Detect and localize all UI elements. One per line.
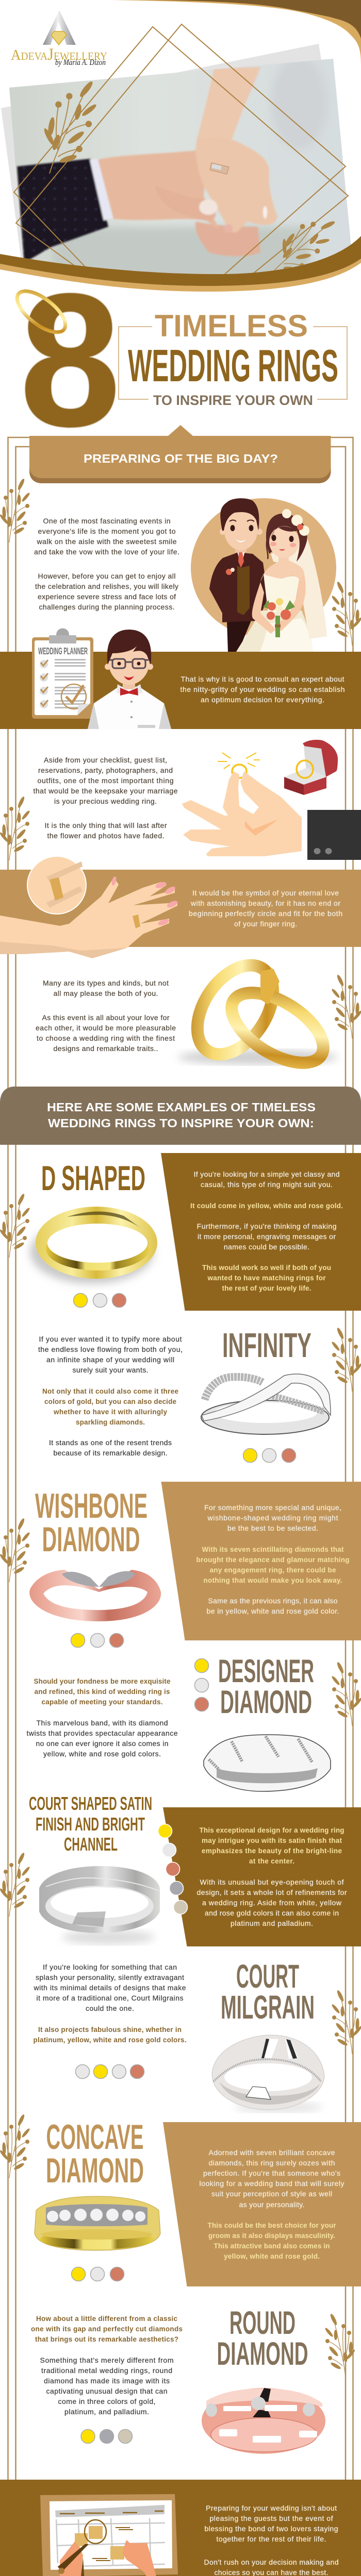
text: court shaped [197,1826,347,1927]
icon: gold ring on the 8 [10,284,72,340]
sprig: hero right [273,222,335,270]
logo: Adeva Jewellery: by Maria A. Dizon [55,58,106,67]
text: preparing: blessing the bond of two lovers staying [204,2524,338,2533]
hero photo: holding hands with ring [1,24,351,274]
magnified ring circle [27,856,86,914]
text: consult an expert: the nitty-gritty of your wedding so can establish [180,685,344,693]
image: D shaped gold ring [30,1207,157,1284]
sprig: left [0,796,30,860]
text: preparing: Preparing for your wedding isn't about [206,2504,337,2512]
text: types and kinds: to choose a wedding ring with the finest [37,1034,175,1042]
text: wishbone: nothing that would make you look away. [203,1577,342,1584]
geometric diamond frame [13,24,349,274]
text: D shaped: This would work so well if both of you [202,1264,331,1272]
text: designer diamond: twists that provides spectacular appearance [27,1729,178,1737]
sprig: right [331,1990,361,2054]
text: D shaped: If you're looking for a simple yet classy and [194,1170,339,1178]
banner: examples [0,1087,361,1145]
sprig: left [0,478,30,543]
image: designer silver ring [204,1735,331,1791]
text: court milgrain: It also projects fabulous shine, whether in [38,2026,182,2033]
image: two gold wedding rings [178,952,338,1077]
sprig: hero left [44,81,96,174]
text: court milgrain: with its minimal details of designs that make [33,1984,186,1992]
text: wishbone: any engagement ring, there could be [209,1566,336,1574]
band: symbol of eternal love [0,870,361,947]
text: types and kinds [36,979,176,1053]
heading: Concave Diamond: CONCAVE [46,2117,143,2157]
panel: wishbone [161,1482,361,1640]
image: wishbone rose ring [29,1570,161,1621]
text: court shaped: With its unusual but eye-opening touch of [200,1878,344,1886]
double frame rails [8,437,353,2576]
heading: Round Diamond [217,2305,308,2372]
text: D shaped: Furthermore, if you're thinking of making [197,1222,336,1230]
text: infinity: because of its remarkable design. [54,1449,167,1457]
text: concave: as your personality. [239,2200,304,2209]
text: court shaped: platinum and palladium. [231,1919,313,1927]
text: D shaped: the rest of your lovely life. [222,1284,311,1292]
intro text: the celebration and relishes, you will likely [35,582,178,590]
text: round diamond: How about a little different from a classic [36,2315,177,2323]
intro text: challenges during the planning process. [39,603,174,611]
text: D shaped: casual, this type of ring might suit you. [201,1180,333,1189]
text: checklist: It is the only thing that will last after [44,821,167,829]
text: concave: perfection. If you're that someone who's [203,2169,340,2177]
panel: concave [163,2122,361,2286]
heading: Court Shaped Satin: FINISH AND BRIGHT [36,1814,145,1835]
text: types and kinds: As this event is all about your love for [42,1013,170,1022]
swatches: infinity [243,1449,296,1462]
text: concave: looking for a wedding band that will surely [199,2179,344,2188]
text: concave: diamonds, this ring surely oozes with [208,2159,335,2167]
intro text [34,517,179,611]
text: designer diamond [27,1677,178,1758]
heading: Wishbone Diamond [35,1486,147,1559]
image: court milgrain ring [212,2035,324,2112]
sprig: left [0,1518,30,1582]
text: round diamond: traditional metal wedding rings, round [41,2366,172,2375]
sprig: right [331,1327,361,1392]
text: infinity [38,1335,183,1457]
heading: Round Diamond: ROUND [229,2305,296,2341]
text: court shaped: a wedding ring. Aside from white, yellow [202,1899,342,1907]
text: D shaped [190,1170,343,1292]
intro text: everyone's life is the moment you got to [38,527,176,535]
logo: Adeva Jewellery: ADEVAJEWELLERY [11,45,107,64]
heading: Wishbone Diamond: WISHBONE [35,1486,147,1526]
text: round diamond: come in three colors of gold, [58,2397,156,2405]
title [128,309,338,408]
intro text: One of the most fascinating events in [43,517,170,525]
title: TIMELESS [155,309,308,343]
text: round diamond: platinum, and palladium. [64,2408,149,2416]
heading: D Shaped: D SHAPED [41,1159,145,1198]
text: eternal love: beginning perfectly circle and fit for the both [189,909,342,918]
text: infinity: an infinite shape of your wedding will [46,1355,174,1364]
text: checklist: that would be the keepsake your marriage [33,787,178,795]
text: infinity: It stands as one of the resent trends [49,1438,172,1447]
text: types and kinds: designs and remarkable traits.. [54,1044,158,1053]
heading: Wishbone Diamond: DIAMOND [42,1520,140,1559]
intro text: and take the vow with the love of your life. [34,548,179,556]
banner: preparing [29,425,331,483]
text: D shaped: It could come in yellow, white and rose gold. [190,1202,343,1210]
image: infinity ring [201,1374,331,1434]
swatches: court milgrain [75,2065,144,2078]
text: round diamond: Something that's merely different from [40,2356,173,2364]
top corner swoosh [110,0,361,64]
text: court shaped: emphasizes the beauty of the bright-line [202,1847,342,1855]
text: court milgrain: platinum, yellow, white and rose gold colors. [33,2036,187,2044]
text: checklist: the flower and photos have faded. [47,832,164,840]
text: concave: This attractive band also comes in [214,2242,330,2250]
text: court shaped: This exceptional design for a wedding ring [199,1826,344,1834]
text: concave: groom as it also displays masculinity. [208,2232,335,2240]
text: types and kinds: each other, it would be more pleasurable [36,1024,176,1032]
text: eternal love: of your finger ring. [234,920,297,928]
text: infinity: Not only that it could also come it three [42,1387,178,1395]
text: round diamond: one with its gap and perfectly cut diamonds [31,2325,183,2333]
text: preparing [204,2504,338,2576]
banner: preparing: PREPARING OF THE BIG DAY? [84,452,278,465]
text: infinity: the endless love flowing from both of you, [38,1345,183,1353]
text: designer diamond: capable of meeting your standards. [41,1698,163,1706]
text: round diamond: captivating unusual design that can [46,2387,167,2395]
title frame lines [119,327,347,399]
text: court shaped: at the center. [249,1857,294,1865]
heading: Court Shaped Satin: COURT SHAPED SATIN [29,1793,152,1814]
hero curved band [0,236,361,292]
text: concave [199,2148,344,2260]
heading: Court Shaped Satin [29,1793,152,1855]
swatches: concave [71,2267,124,2281]
text: designer diamond: no one can ever ignore it also comes in [36,1739,168,1748]
swatches: wishbone [71,1633,124,1648]
text: types and kinds: Many are its types and kinds, but not [43,979,169,987]
logo: Adeva Jewellery [11,10,107,67]
sprig: right [331,1662,361,1726]
text: wishbone: For something more special and unique, [204,1503,341,1512]
title: TO INSPIRE YOUR OWN [153,393,313,408]
text: court milgrain: could the one. [86,2004,134,2012]
illustration: hand wearing ring [0,876,178,958]
text: round diamond: that brings out its remarkable aesthetics? [35,2335,178,2343]
text: concave: This could be the best choice for your [207,2222,336,2229]
band: consult an expert [0,652,361,729]
sprig: left [0,2114,30,2178]
panel: court shaped [163,1807,361,1946]
text: infinity: whether to have it with alluringly [53,1408,167,1416]
illustration: hand holding ring [182,753,302,856]
text: consult an expert: an optimum decision for everything. [201,696,324,704]
image: round diamond rose ring [202,2388,325,2454]
text: preparing: Don't rush on your decision making and [204,2558,338,2566]
banner: examples: HERE ARE SOME EXAMPLES OF TIMELESS [47,1100,316,1114]
intro text: However, before you can get to enjoy all [38,572,175,580]
sprig: right [331,974,361,1039]
text: consult an expert: That is why it is good to consult an expert about [180,675,344,683]
text: D shaped: it more personal, engraving messages or [198,1232,336,1241]
illustration: calendar planning [40,2494,183,2576]
text: court milgrain: splash your personality, silently extravagant [36,1973,184,1981]
text: eternal love [189,889,342,928]
swatches: court shaped [158,1824,188,1914]
swatches: D shaped [73,1293,126,1308]
text: infinity: sparkling diamonds. [76,1418,145,1426]
text: checklist: Aside from your checklist, guest list, [44,756,167,764]
sprig: left [0,1193,30,1258]
text: court shaped: may intrigue you with its satin finish that [202,1837,342,1844]
heading: Concave Diamond: DIAMOND [46,2151,144,2190]
heading: Court Milgrain: COURT [236,1958,299,1995]
white page below hero curve [0,236,361,314]
swatches: designer [195,1659,208,1711]
text: wishbone [196,1503,350,1615]
text: designer diamond: and refined, this kind of wedding ring is [34,1688,170,1696]
text: eternal love: with astonishing beauty, for it has no end or [190,899,340,907]
text: preparing: pleasing the guests but the event of [209,2514,333,2522]
jacket sleeve [307,810,361,860]
heading: Designer Diamond [218,1653,314,1720]
text: D shaped: names could be possible. [224,1243,309,1251]
illustration: wedding planner clipboard [32,629,93,719]
text: designer diamond: This marvelous band, with its diamond [36,1719,168,1727]
text: designer diamond: yellow, white and rose gold colors. [43,1750,161,1758]
text: wishbone: be in yellow, white and rose gold color. [206,1607,339,1615]
illustration: wedding planner man [88,630,171,729]
text: infinity: colors of gold, but you can also decide [44,1398,176,1405]
text: infinity: If you ever wanted it to typify more about [39,1335,182,1343]
intro text: walk on the aisle with the sweetest smile [36,537,177,546]
text: wishbone: brought the elegance and glamour matching [196,1556,350,1564]
image: concave diamond ring [35,2196,160,2250]
text: court shaped: design, it sets a whole lot of refinements for [197,1888,347,1896]
text: infinity: surely suit your wants. [72,1366,149,1374]
text: round diamond: diamond has made its image with its [44,2377,170,2385]
text: D shaped: wanted to have matching rings for [207,1274,326,1282]
title numeral 8: 8 [20,254,121,466]
text: eternal love: It would be the symbol of your eternal love [192,889,339,897]
image: court satin ring [39,1866,160,1944]
heading: Concave Diamond [46,2117,144,2190]
swatches: round diamond [81,2430,132,2443]
text: consult an expert [180,675,344,704]
illustration: bride and groom [191,498,336,652]
band: preparing for your wedding [0,2480,361,2576]
text: concave: suit your perception of style as well [211,2190,332,2198]
sprig: right [331,581,361,646]
illustration: ring box red [284,740,338,795]
text: wishbone: With its seven scintillating diamonds that [202,1546,344,1553]
text: checklist [33,756,178,840]
text: court milgrain [33,1963,187,2044]
text: wishbone: Same as the previous rings, it can also [208,1597,338,1605]
sprig: left [0,1852,30,1917]
banner: examples: WEDDING RINGS TO INSPIRE YOUR OWN: [48,1116,314,1130]
text: court milgrain: it more of a traditional one, Court Milgrains [36,1994,184,2002]
text: court shaped: and rose gold colors it can also come in [205,1909,339,1917]
text: concave: yellow, white and rose gold. [224,2252,320,2260]
text: wishbone: be the best to be selected. [227,1524,318,1532]
text: court milgrain: If you're looking for something that can [43,1963,177,1971]
text: round diamond [31,2315,183,2416]
illustration: wedding planner clipboard: WEDDING PLANNER [38,646,88,656]
sprig: right [324,2313,356,2378]
text: checklist: is your precious wedding ring. [54,797,157,805]
panel: D shaped [161,1153,361,1311]
text: types and kinds: all may please the both of you. [54,989,158,997]
text: concave: Adorned with seven brilliant concave [208,2148,335,2157]
text: designer diamond: Should your fondness be more exquisite [34,1677,171,1685]
heading: Court Milgrain [221,1958,315,2026]
text: checklist: outfits, one of the most important thing [37,776,173,785]
text: preparing: together for the rest of their life. [217,2535,326,2543]
intro text: experience severe stress and face lots of [38,592,176,601]
text: wishbone: wishbone-shaped wedding ring might [207,1514,338,1522]
text: checklist: reservations, party, photographers, and [38,766,173,774]
heading: Court Shaped Satin: CHANNEL [64,1834,118,1855]
